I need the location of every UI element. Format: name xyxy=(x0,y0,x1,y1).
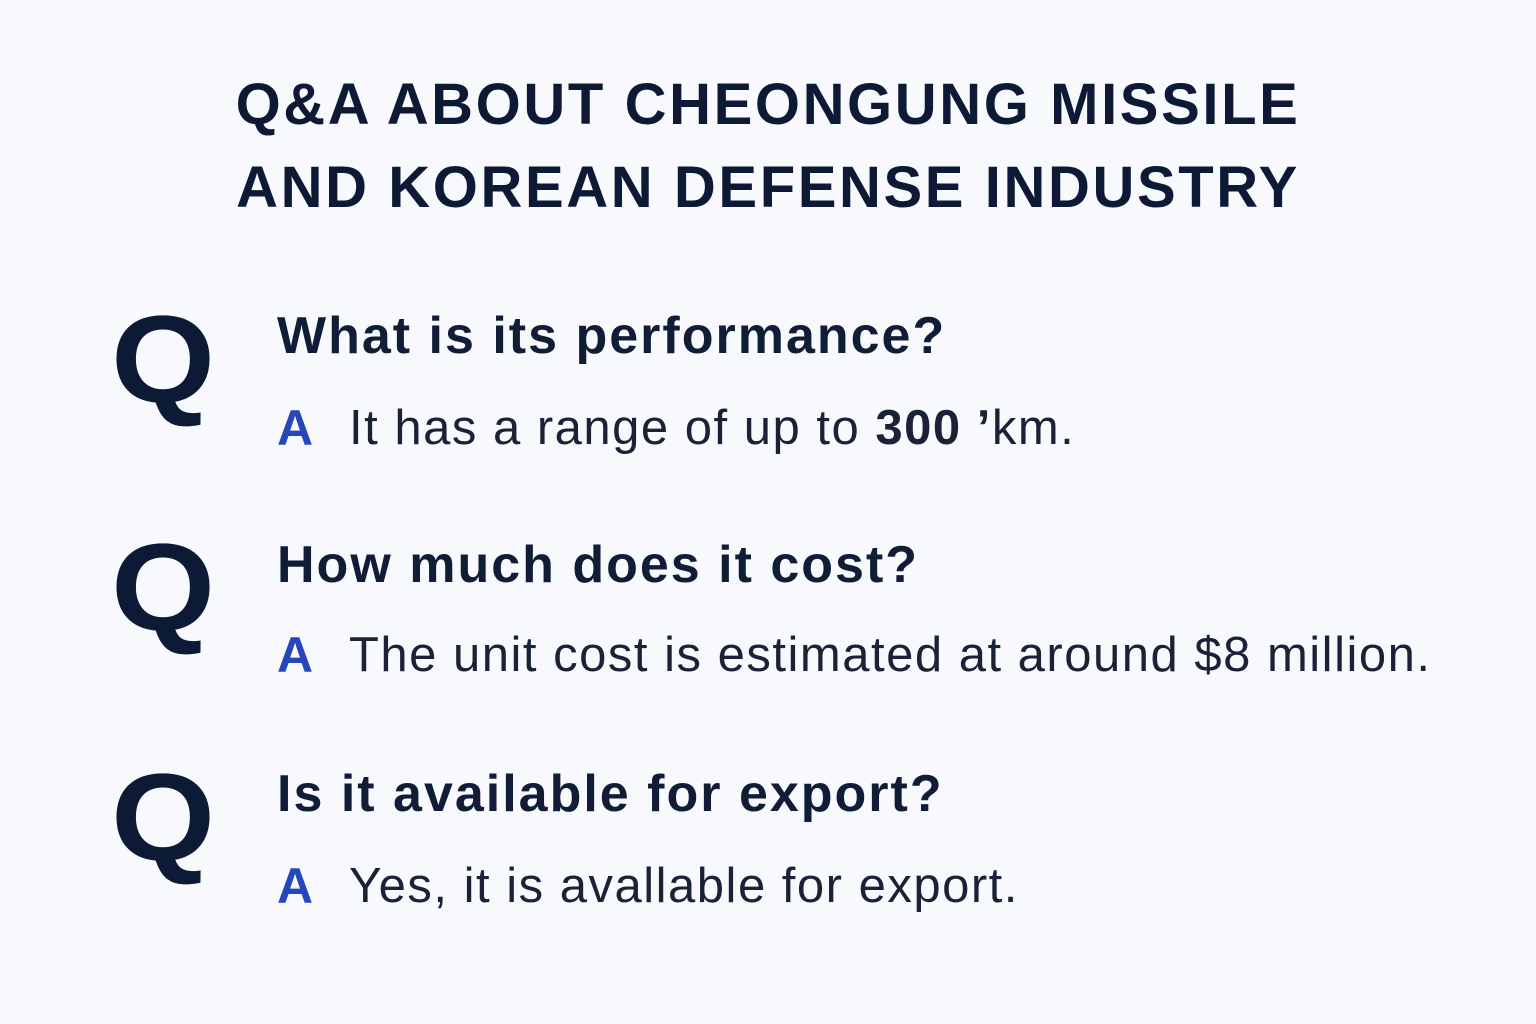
qa item 3 xyxy=(111,749,1019,914)
qa item 1 xyxy=(111,291,1075,456)
answer text 2: The unit cost is estimated at around $8 million. xyxy=(349,628,1431,682)
title xyxy=(236,72,1300,220)
answer label 1: A xyxy=(277,400,313,456)
question 2: How much does it cost? xyxy=(277,536,919,594)
answer label 3: A xyxy=(277,858,313,914)
icon: Q letter 3: Q xyxy=(111,749,215,887)
answer label 2: A xyxy=(277,627,313,683)
qa item 2 xyxy=(111,519,1431,683)
answer text 1: It has a range of up to 300 ’km. xyxy=(349,401,1075,455)
answer text 3: Yes, it is avallable for export. xyxy=(349,859,1019,913)
icon: Q letter 2: Q xyxy=(111,519,215,657)
question 1: What is its performance? xyxy=(277,307,946,365)
title: Q&A ABOUT CHEONGUNG MISSILE xyxy=(236,72,1300,137)
title: AND KOREAN DEFENSE INDUSTRY xyxy=(236,155,1300,220)
icon: Q letter 1: Q xyxy=(111,291,215,429)
question 3: Is it available for export? xyxy=(277,765,944,823)
